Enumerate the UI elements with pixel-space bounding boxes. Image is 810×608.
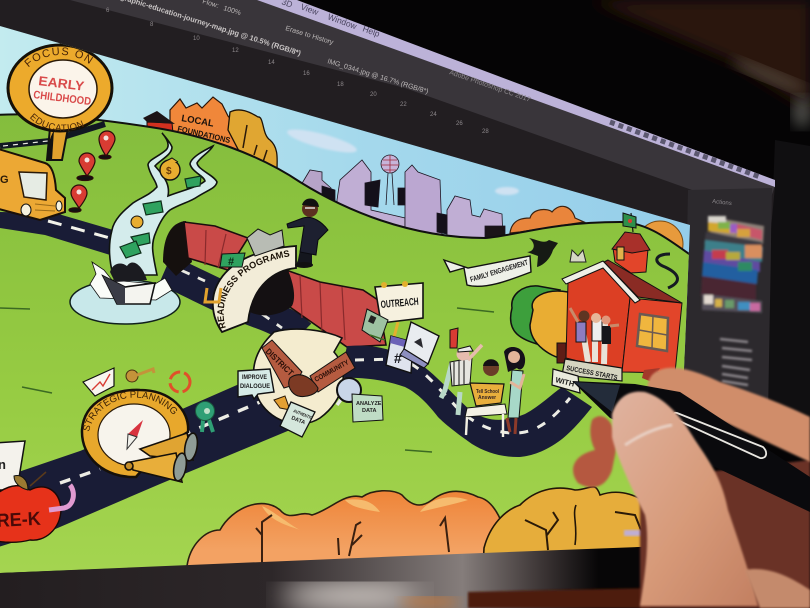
arm labels: DISTRICT — [264, 346, 296, 378]
yellow bush — [530, 291, 568, 360]
artist's hand holding stylus — [572, 368, 810, 608]
schoolhouse — [557, 213, 682, 382]
binoculars — [125, 432, 199, 482]
note card behind apple — [0, 441, 25, 490]
tool options: 100% — [222, 5, 242, 17]
paper: analyze data: DATA — [362, 408, 376, 414]
apple worm — [49, 485, 73, 510]
stylus rocker switch — [674, 413, 766, 458]
water tower — [381, 155, 399, 205]
school flag — [623, 213, 636, 232]
compass needle — [127, 420, 143, 449]
tablet bottom bezel — [0, 546, 680, 608]
child reading at desk: Answer — [478, 395, 496, 401]
label: local foundations: LOCAL — [180, 113, 215, 130]
ruler numbers: 18 — [337, 82, 344, 88]
key — [126, 369, 154, 382]
desk glow top right — [590, 0, 810, 128]
card: authentic data — [280, 402, 315, 437]
sign: focus on early childhood education: EARLY — [38, 73, 85, 94]
figures in crate — [110, 262, 147, 282]
tool options: Adobe Photoshop CC 2017 — [448, 69, 531, 104]
window — [637, 314, 668, 351]
card: authentic data: DATA — [290, 415, 306, 426]
ruler numbers: 22 — [400, 102, 407, 108]
map pins — [69, 131, 115, 212]
hash app card — [386, 336, 413, 373]
tablet right bezel — [765, 140, 810, 430]
small birds on roof — [570, 250, 586, 262]
autumn yellow trees — [228, 110, 277, 170]
tool options: IMG_0344.jpg @ 16.7% (RGB/8*) — [326, 58, 429, 96]
magnifying glass — [337, 378, 361, 405]
main road — [0, 346, 592, 548]
local foundations buildings: FOUNDATIONS — [177, 124, 232, 145]
road dashes — [60, 402, 260, 483]
right side panel with swatches — [684, 188, 772, 415]
child reading at desk: Tell School — [476, 389, 500, 395]
local foundations buildings — [143, 97, 277, 170]
ruler numbers: 6 — [106, 8, 110, 14]
menu labels: Window — [326, 11, 359, 32]
crate — [103, 276, 155, 304]
ruler numbers: 24 — [430, 112, 437, 118]
contact card — [362, 309, 388, 342]
family engagement banner — [444, 238, 558, 286]
splash foam — [90, 262, 172, 300]
rocks on arch — [247, 229, 284, 256]
child reading at desk — [465, 359, 507, 437]
menu labels — [280, 0, 381, 39]
sun — [645, 220, 684, 248]
pre-k apple — [0, 472, 61, 542]
person cheering — [441, 328, 482, 415]
index finger — [647, 368, 810, 462]
success starts steps sign: WITH — [555, 375, 575, 389]
title bar icons — [610, 122, 760, 177]
hash flag: # — [228, 256, 234, 268]
palm shadow — [640, 460, 810, 608]
readiness programs arch — [203, 228, 297, 334]
sign: focus on early childhood education: CHILDHOOD — [33, 89, 92, 108]
sign: focus on early childhood education — [6, 44, 114, 161]
left tunnel — [163, 221, 248, 276]
key, chart and refresh icons — [83, 368, 214, 432]
clouds — [285, 125, 519, 195]
paper: analyze data — [352, 394, 383, 422]
paper: analyze data: ANALYZE — [356, 401, 382, 407]
ruler numbers: 20 — [370, 92, 377, 98]
right tunnel — [286, 270, 386, 347]
lower hand — [745, 569, 810, 608]
district and community handshake — [253, 329, 355, 424]
green hill — [0, 114, 700, 600]
ribbon badge — [196, 402, 214, 432]
money waterfall — [70, 133, 217, 324]
ruler numbers: 12 — [232, 48, 239, 54]
autumn tree hedge yellow — [482, 487, 680, 590]
money bag: $ — [166, 166, 172, 177]
outreach sign — [375, 281, 423, 346]
success starts steps sign — [552, 359, 622, 393]
thumb — [612, 392, 758, 606]
bills — [120, 176, 201, 258]
strategic planning compass: STRATEGIC PLANNING — [83, 391, 178, 432]
thumbnail line — [625, 425, 672, 445]
layers panel rows — [720, 339, 752, 385]
leaf — [274, 396, 290, 410]
refresh arrows — [170, 372, 190, 392]
laptop — [400, 322, 439, 368]
line chart card — [83, 368, 114, 396]
green bush — [511, 286, 560, 345]
autumn tree hedge orange — [187, 491, 510, 590]
door — [557, 343, 566, 363]
coin — [131, 216, 143, 228]
money bag — [160, 158, 180, 180]
ruler numbers: 14 — [268, 60, 275, 66]
readiness programs arch: READINESS PROGRAMS — [217, 250, 290, 328]
ruler numbers: 10 — [193, 36, 200, 42]
ruler numbers: 8 — [150, 22, 154, 28]
ruler numbers: 26 — [456, 121, 463, 127]
school bus: G — [0, 174, 9, 186]
upper road — [0, 212, 300, 335]
title bar strip — [257, 0, 775, 187]
options bar — [70, 0, 775, 200]
woman with glasses — [504, 347, 525, 434]
bird — [527, 238, 558, 267]
red barn — [143, 111, 175, 130]
ruler numbers: 16 — [303, 71, 310, 77]
ruler numbers: 28 — [482, 129, 489, 135]
illustration canvas — [0, 26, 690, 573]
stylus — [572, 381, 810, 512]
presenter in suit — [287, 198, 328, 268]
city skyline — [301, 155, 505, 240]
children on steps — [570, 308, 619, 364]
speech bubble: improve dialogue: DIALOGUE — [240, 383, 271, 390]
Photoshop window chrome — [0, 0, 775, 420]
curled fingers — [573, 416, 617, 487]
outreach sign: OUTREACH — [380, 296, 419, 311]
back winding road — [657, 254, 677, 288]
grass tufts — [0, 308, 494, 452]
school bus — [0, 148, 65, 220]
card: authentic data: AUTHENTIC — [293, 408, 314, 421]
sign: focus on early childhood education: EDUCATION — [30, 113, 84, 132]
district and community handshake: COMMUNITY — [314, 359, 350, 384]
sign: focus on early childhood education: FOCUS ON — [24, 47, 94, 67]
cupola — [612, 232, 650, 273]
panel label: Actions — [712, 199, 732, 207]
menu labels: Help — [361, 23, 381, 39]
hilltop bushes — [510, 206, 584, 233]
hash app card: # — [394, 350, 402, 366]
family engagement banner: FAMILY ENGAGEMENT — [469, 258, 529, 284]
tool options — [201, 0, 531, 104]
speech bubble: improve dialogue: IMPROVE — [242, 375, 267, 381]
success starts steps sign: SUCCESS STARTS — [566, 365, 618, 382]
speech bubble: improve dialogue — [238, 369, 274, 399]
horseshoe magnet — [205, 288, 221, 302]
colour swatches — [701, 216, 764, 313]
ruler numbers — [106, 8, 489, 135]
far road behind sign — [0, 124, 105, 146]
strategic planning compass — [80, 388, 190, 478]
sky — [0, 26, 690, 369]
menu labels: View — [299, 1, 321, 17]
splash pool — [70, 280, 180, 324]
tool options: Erase to History — [284, 25, 335, 47]
